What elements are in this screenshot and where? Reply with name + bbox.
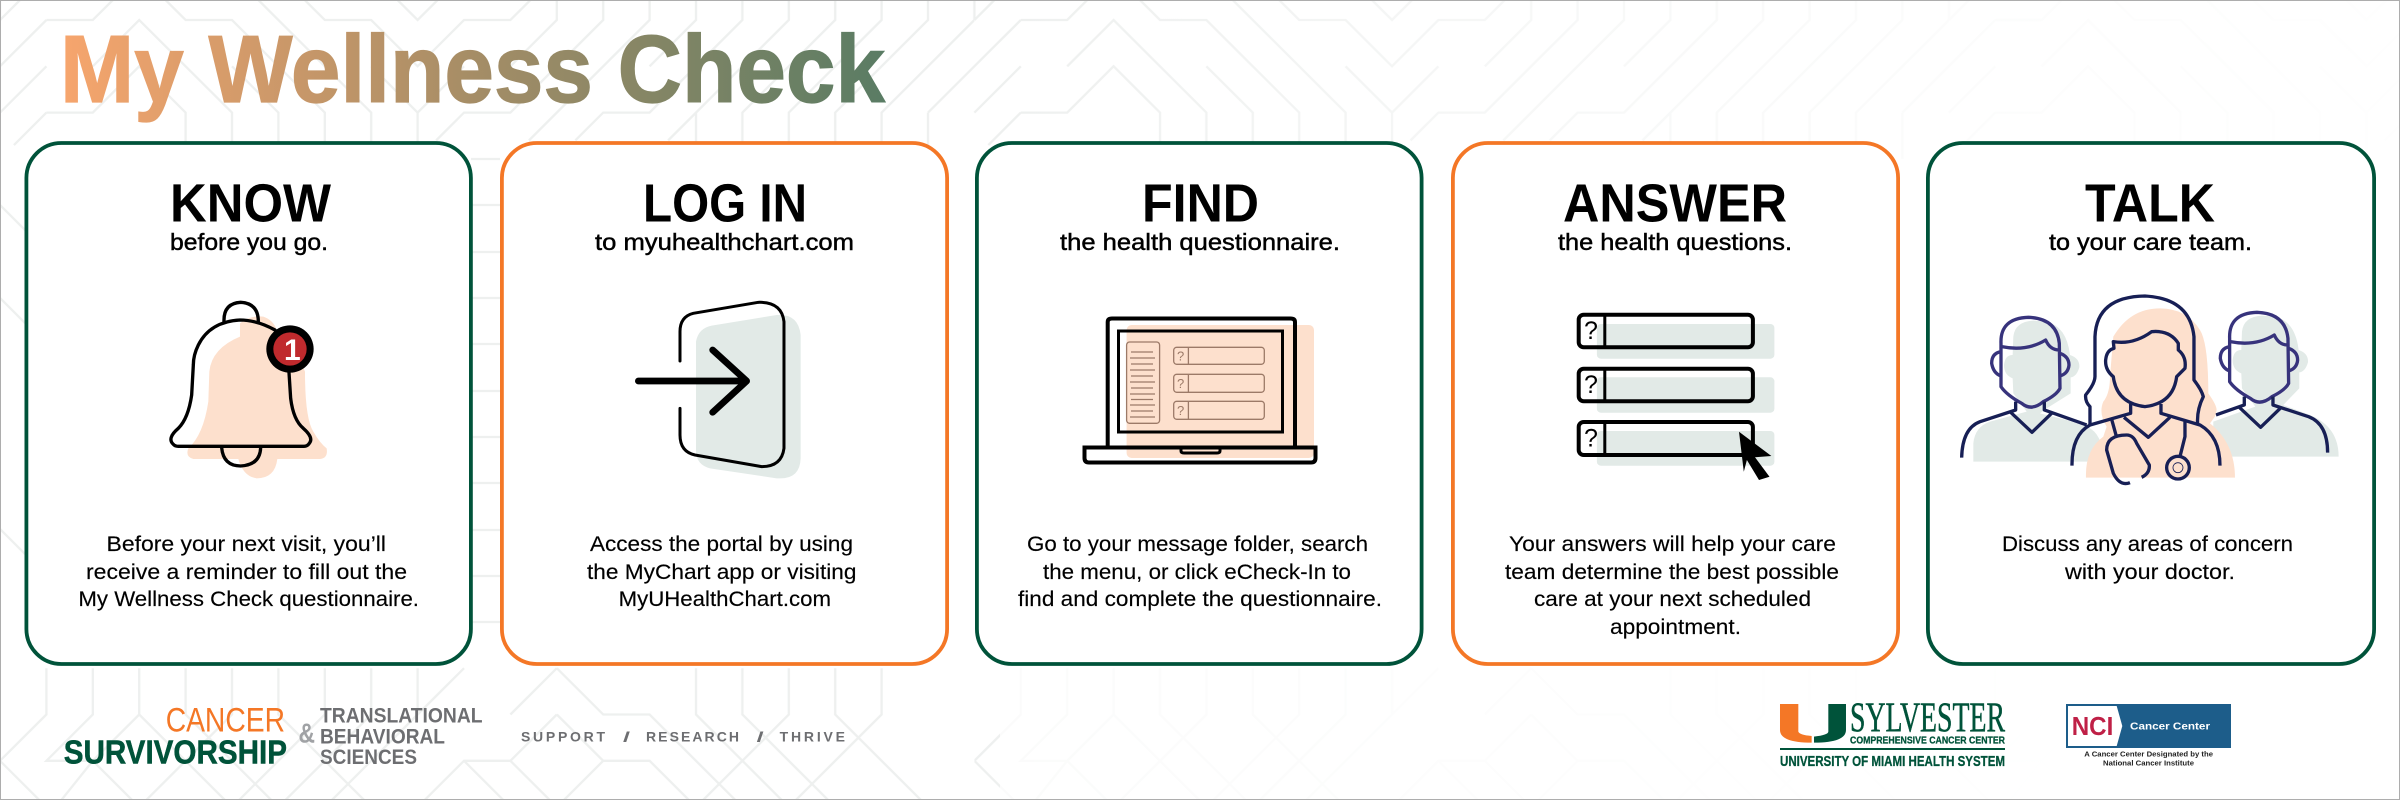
body text: talk: with your doctor. xyxy=(2064,561,2235,584)
body text: know: My Wellness Check questionnaire. xyxy=(78,588,419,611)
logo: cancer survivorship and translational behavioral sciences: SCIENCES xyxy=(320,745,417,769)
logo: nci cancer center: Cancer Center xyxy=(2130,721,2210,732)
logo: cancer survivorship and translational behavioral sciences: TRANSLATIONAL xyxy=(320,704,483,728)
panel: answer xyxy=(1453,143,1898,664)
body text: know xyxy=(78,533,419,611)
logo: nci cancer center: A Cancer Center Designated by the xyxy=(2084,750,2213,759)
icon: notification bell xyxy=(171,302,327,478)
body text: talk: Discuss any areas of concern xyxy=(2002,533,2293,556)
icon: question rows with cursor xyxy=(1579,315,1774,480)
tagline: support research thrive: / xyxy=(623,729,630,745)
tagline: support research thrive: SUPPORT xyxy=(521,729,605,745)
icon: laptop with questionnaire: ? xyxy=(1177,376,1184,391)
tagline: support research thrive: RESEARCH xyxy=(646,729,739,745)
body text: answer: team determine the best possible xyxy=(1505,561,1839,584)
icon: laptop with questionnaire: ? xyxy=(1177,403,1184,418)
logo: nci cancer center: NCI xyxy=(2072,713,2113,741)
icon: question rows with cursor: ? xyxy=(1584,317,1598,345)
icon: care team xyxy=(1962,296,2339,484)
panel: talk xyxy=(1928,143,2374,664)
body text: answer: appointment. xyxy=(1610,616,1741,639)
icon: question rows with cursor: ? xyxy=(1584,424,1598,452)
heading: know: KNOW xyxy=(170,174,331,234)
heading: answer: ANSWER xyxy=(1563,174,1787,234)
subheading: the health questionnaire: the health questionnaire. xyxy=(1060,229,1340,255)
icon: mouse cursor xyxy=(1739,432,1771,480)
body text: find: the menu, or click eCheck-In to xyxy=(1043,561,1351,584)
logo: cancer survivorship and translational behavioral sciences: SURVIVORSHIP xyxy=(64,733,287,770)
body text: find: Go to your message folder, search xyxy=(1027,533,1368,556)
title: My Wellness Check xyxy=(60,16,886,123)
logo: cancer survivorship and translational behavioral sciences: & xyxy=(298,718,315,749)
panel: find xyxy=(977,143,1422,664)
logo: sylvester comprehensive cancer center: SYLVESTER xyxy=(1850,696,2005,742)
body text: answer: Your answers will help your care xyxy=(1509,533,1836,556)
body text: answer: care at your next scheduled xyxy=(1534,588,1811,611)
heading: talk: TALK xyxy=(2085,174,2215,234)
tagline: support research thrive xyxy=(521,729,845,745)
body text: talk xyxy=(2002,533,2293,584)
body text: log in xyxy=(587,533,856,611)
tagline: support research thrive: / xyxy=(757,729,764,745)
panel: log in xyxy=(502,143,947,664)
icon: laptop with questionnaire xyxy=(1084,318,1316,462)
icon: question rows with cursor: ? xyxy=(1584,371,1598,399)
body text: log in: the MyChart app or visiting xyxy=(587,561,856,584)
body text: find xyxy=(1018,533,1382,611)
left care team member xyxy=(1962,317,2103,462)
panel: know xyxy=(26,143,471,664)
subheading: before you go: before you go. xyxy=(170,229,328,255)
logo: cancer survivorship and translational behavioral sciences: CANCER xyxy=(166,702,285,740)
logo: sylvester comprehensive cancer center xyxy=(1780,696,2006,770)
icon: door with arrow xyxy=(638,302,801,478)
subheading: to myuhealthchart.com: to myuhealthchart.com xyxy=(595,229,854,255)
subheading: to your care team: to your care team. xyxy=(2049,229,2252,255)
logo: nci cancer center: National Cancer Institute xyxy=(2103,758,2194,767)
icon: laptop with questionnaire: ? xyxy=(1177,348,1184,364)
subheading: the health questions: the health questions. xyxy=(1558,229,1792,255)
body text: answer xyxy=(1505,533,1839,639)
icon: notification bell: 1 xyxy=(284,334,301,367)
right care team member xyxy=(2213,312,2339,457)
logo: sylvester comprehensive cancer center: UNIVERSITY OF MIAMI HEALTH SYSTEM xyxy=(1780,753,2005,770)
logo: cancer survivorship and translational behavioral sciences xyxy=(64,702,483,770)
body text: know: Before your next visit, you’ll xyxy=(106,533,386,556)
logo: cancer survivorship and translational behavioral sciences: BEHAVIORAL xyxy=(320,724,445,748)
body text: know: receive a reminder to fill out the xyxy=(86,561,407,584)
body text: log in: MyUHealthChart.com xyxy=(619,588,831,611)
logo: sylvester comprehensive cancer center: COMPREHENSIVE CANCER CENTER xyxy=(1850,735,2006,746)
heading: find: FIND xyxy=(1142,174,1259,234)
body text: find: find and complete the questionnaire. xyxy=(1018,588,1382,611)
logo: nci cancer center xyxy=(2066,704,2231,767)
heading: log in: LOG IN xyxy=(643,174,807,234)
tagline: support research thrive: THRIVE xyxy=(780,729,845,745)
doctor xyxy=(2072,296,2235,484)
body text: log in: Access the portal by using xyxy=(590,533,853,556)
icon: u mark xyxy=(1780,704,1846,743)
